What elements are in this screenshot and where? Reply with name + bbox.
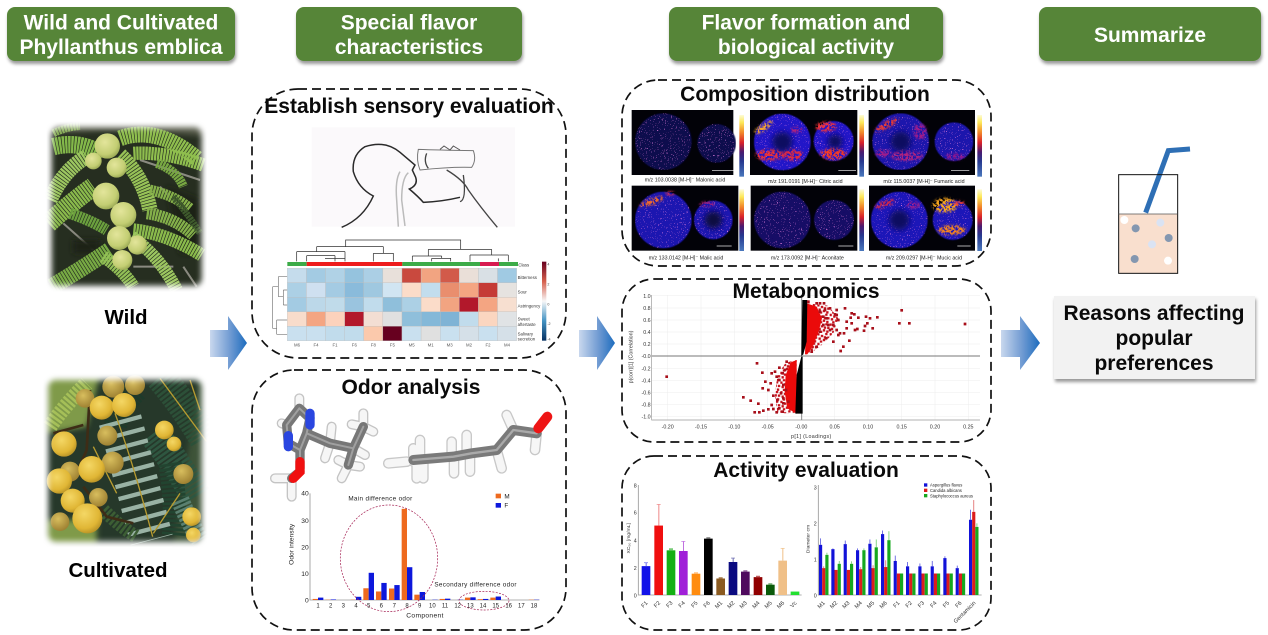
- chart: S-plot of loadings versus correlation: 0.20: [930, 424, 940, 430]
- chart: S-plot of loadings versus correlation: p(corr)[1] (Correlation): [629, 330, 635, 383]
- chart: sensory heatmap: 4: [547, 263, 549, 267]
- chart: inhibition zone diameter bars: F4: [929, 601, 938, 609]
- chart: sensory heatmap: Astringency: [518, 304, 541, 309]
- chart: odor intensity by component: 18: [531, 603, 538, 609]
- chart: S-plot of loadings versus correlation: [629, 294, 980, 440]
- chart: S-plot of loadings versus correlation: 0.6: [643, 318, 651, 324]
- chart: sensory heatmap: F4: [313, 343, 319, 348]
- chart: inhibition zone diameter bars: F2: [905, 601, 914, 609]
- image: malic acid distribution: m/z 133.0142 [M-H]⁻ Malic acid: [649, 255, 723, 261]
- chart: odor intensity by component: [288, 491, 539, 620]
- callout: reasons affecting popular preferences: Reasons affecting: [1064, 302, 1244, 325]
- chart: inhibition zone diameter bars: 1: [814, 557, 817, 563]
- arrow: varieties to flavor: [210, 316, 247, 370]
- chart: inhibition zone diameter bars: M3: [842, 601, 851, 610]
- image: mucic acid distribution: m/z 209.0297 [M-H]⁻ Mucic acid: [886, 255, 962, 261]
- chart: sensory heatmap: -2: [547, 322, 551, 326]
- panel: composition distribution: [622, 80, 991, 266]
- chart: odor intensity by component: Main difference odor: [348, 496, 413, 503]
- chart: sensory heatmap: secretion: [518, 337, 536, 342]
- chart: odor intensity by component: 6: [380, 603, 384, 609]
- panel: odor analysis: [252, 370, 566, 630]
- chart: sensory heatmap: F2: [485, 343, 491, 348]
- callout: reasons affecting popular preferences: popular: [1116, 327, 1192, 350]
- chart: sensory heatmap: aftertaste: [518, 322, 536, 327]
- molecule: aldehyde odor compound: [388, 415, 547, 478]
- photo: cultivated Phyllanthus emblica: [43, 373, 207, 547]
- chart: inhibition zone diameter bars: F1: [892, 601, 901, 609]
- chart: XC50 bars: 4: [634, 538, 637, 544]
- header: flavor formation and biological activity: [669, 7, 943, 61]
- chart: odor intensity by component: 12: [454, 603, 462, 609]
- header: flavor formation and biological activity: Flavor formation and: [702, 12, 910, 34]
- heading: activity evaluation: Activity evaluation: [713, 459, 899, 482]
- heading: metabonomics: Metabonomics: [732, 280, 880, 303]
- chart: odor intensity by component: 8: [405, 603, 409, 609]
- chart: XC50 bars: F3: [665, 601, 674, 609]
- photo: wild Phyllanthus emblica: [47, 122, 207, 292]
- chart: inhibition zone diameter bars: Gentamicin: [953, 601, 977, 625]
- chart: inhibition zone diameter bars: M1: [817, 601, 827, 610]
- chart: S-plot of loadings versus correlation: -0.05: [762, 424, 774, 430]
- chart: S-plot of loadings versus correlation: 0.10: [863, 424, 873, 430]
- chart: sensory heatmap: [273, 240, 551, 348]
- image: aconitate distribution: m/z 173.0092 [M-H]⁻ Aconitate: [771, 255, 844, 261]
- header: summarize: Summarize: [1094, 24, 1206, 47]
- chart: odor intensity by component: 16: [505, 603, 513, 609]
- chart: inhibition zone diameter bars: Candida albicans: [930, 488, 962, 493]
- chart: sensory heatmap: Sweet: [518, 317, 530, 322]
- chart: XC50 bars: F6: [703, 601, 712, 609]
- chart: inhibition zone diameter bars: 0: [814, 593, 817, 599]
- chart: inhibition zone diameter bars: F3: [917, 601, 926, 609]
- image: malonic acid distribution: [632, 110, 744, 184]
- header: summarize: [1039, 7, 1261, 61]
- chart: S-plot of loadings versus correlation: -0.8: [641, 403, 651, 409]
- chart: odor intensity by component: 3: [342, 603, 346, 609]
- image: fumaric acid distribution: m/z 115.0037 [M-H]⁻ Fumaric acid: [883, 179, 965, 185]
- panel: establish sensory evaluation: [252, 89, 566, 358]
- chart: S-plot of loadings versus correlation: -0.0: [641, 354, 651, 360]
- chart: odor intensity by component: 40: [301, 491, 309, 498]
- chart: odor intensity by component: 13: [467, 603, 474, 609]
- chart: odor intensity by component: 2: [329, 603, 333, 609]
- chart: odor intensity by component: F: [504, 503, 508, 510]
- chart: XC50 bars: XC₅₀ [mg/mL]: [626, 523, 632, 554]
- chart: S-plot of loadings versus correlation: -1.0: [641, 415, 651, 421]
- chart: sensory heatmap: -4: [547, 338, 551, 342]
- chart: sensory heatmap: 0: [547, 303, 549, 307]
- chart: XC50 bars: M6: [776, 601, 786, 610]
- header: special flavor characteristics: [296, 7, 522, 61]
- label: wild: Wild: [104, 306, 148, 329]
- chart: XC50 bars: M2: [727, 601, 736, 610]
- callout: reasons affecting popular preferences: preferences: [1094, 352, 1214, 375]
- chart: sensory heatmap: M1: [428, 343, 434, 348]
- chart: sensory heatmap: F8: [371, 343, 376, 348]
- image: mucic acid distribution: [869, 186, 982, 261]
- chart: S-plot of loadings versus correlation: -0.20: [662, 424, 674, 430]
- chart: S-plot of loadings versus correlation: -0.10: [728, 424, 740, 430]
- chart: inhibition zone diameter bars: 3: [814, 486, 817, 492]
- molecule: pyrazine odor compound: [275, 398, 373, 497]
- chart: sensory heatmap: M4: [504, 343, 511, 348]
- chart: odor intensity by component: 20: [301, 545, 309, 552]
- chart: odor intensity by component: 14: [480, 603, 487, 609]
- chart: XC50 bars: 6: [634, 511, 637, 517]
- chart: odor intensity by component: 17: [518, 603, 525, 609]
- chart: S-plot of loadings versus correlation: -0.4: [641, 378, 651, 384]
- chart: inhibition zone diameter bars: M5: [866, 601, 876, 610]
- chart: odor intensity by component: Secondary difference odor: [434, 582, 517, 589]
- heading: odor analysis: Odor analysis: [342, 376, 480, 399]
- chart: S-plot of loadings versus correlation: -0.2: [641, 366, 651, 372]
- chart: odor intensity by component: Component: [406, 613, 444, 620]
- chart: XC50 bars: 8: [634, 483, 637, 489]
- chart: S-plot of loadings versus correlation: 0.4: [643, 330, 651, 336]
- chart: XC50 bars: Vc: [789, 600, 799, 609]
- chart: sensory heatmap: Salivary: [518, 331, 534, 336]
- header: special flavor characteristics: characteristics: [335, 36, 483, 59]
- chart: S-plot of loadings versus correlation: -0.00: [795, 424, 807, 430]
- chart: inhibition zone diameter bars: Diameter cm: [805, 525, 811, 553]
- chart: inhibition zone diameter bars: 2: [814, 521, 817, 527]
- chart: sensory heatmap: Class: [518, 263, 529, 268]
- image: aconitate distribution: [751, 186, 864, 261]
- chart: sensory heatmap: Sour: [518, 289, 527, 294]
- heading: composition distribution: Composition distribution: [680, 83, 930, 106]
- callout: reasons affecting popular preferences: [1054, 296, 1255, 379]
- image: malic acid distribution: [632, 186, 744, 261]
- chart: odor intensity by component: 7: [393, 603, 397, 609]
- chart: S-plot of loadings versus correlation: 0.2: [643, 342, 651, 348]
- header: wild and cultivated: Wild and Cultivated: [24, 12, 218, 34]
- image: fumaric acid distribution: [869, 110, 982, 185]
- chart: sensory heatmap: M2: [466, 343, 473, 348]
- chart: XC50 bars: [626, 483, 802, 610]
- chart: inhibition zone diameter bars: M4: [854, 601, 864, 610]
- chart: odor intensity by component: 4: [354, 603, 358, 609]
- header: flavor formation and biological activity: biological activity: [718, 36, 894, 59]
- chart: XC50 bars: F5: [690, 601, 699, 609]
- arrow: formation to summary: [1001, 316, 1040, 370]
- arrow: flavor to formation: [579, 316, 615, 370]
- chart: sensory heatmap: F1: [332, 343, 338, 348]
- chart: odor intensity by component: 10: [301, 571, 309, 578]
- chart: S-plot of loadings versus correlation: 0.8: [643, 306, 651, 312]
- chart: odor intensity by component: 30: [301, 518, 309, 525]
- heading: establish sensory evaluation: Establish sensory evaluation: [264, 95, 554, 118]
- chart: inhibition zone diameter bars: M6: [879, 601, 889, 610]
- chart: odor intensity by component: 5: [367, 603, 371, 609]
- chart: XC50 bars: M1: [714, 601, 724, 610]
- chart: inhibition zone diameter bars: [805, 483, 982, 625]
- chart: odor intensity by component: 0: [305, 597, 309, 604]
- chart: odor intensity by component: 15: [492, 603, 500, 609]
- chart: sensory heatmap: M5: [409, 343, 415, 348]
- chart: sensory heatmap: M6: [294, 343, 301, 348]
- panel: metabonomics: [622, 279, 991, 442]
- chart: odor intensity by component: M: [504, 494, 510, 501]
- chart: S-plot of loadings versus correlation: 0.25: [963, 424, 974, 430]
- chart: odor intensity by component: Odor intensity: [288, 523, 295, 565]
- chart: S-plot of loadings versus correlation: -0.15: [695, 424, 707, 430]
- icon: glass of drink with straw: [1119, 149, 1190, 273]
- chart: odor intensity by component: 1: [316, 603, 320, 609]
- chart: XC50 bars: F4: [678, 601, 687, 609]
- chart: S-plot of loadings versus correlation: -0.6: [641, 391, 651, 397]
- header: wild and cultivated: Phyllanthus emblica: [19, 36, 223, 59]
- chart: XC50 bars: M3: [739, 601, 749, 610]
- image: citric acid distribution: m/z 191.0191 [M-H]⁻ Citric acid: [768, 179, 843, 185]
- chart: inhibition zone diameter bars: F5: [942, 601, 951, 609]
- illustration: person drinking: [312, 127, 515, 227]
- chart: XC50 bars: 2: [634, 566, 637, 572]
- chart: odor intensity by component: 10: [429, 603, 436, 609]
- chart: inhibition zone diameter bars: Staphylococcus aureus: [930, 493, 973, 498]
- chart: inhibition zone diameter bars: Aspergillus flavus: [930, 483, 962, 488]
- image: malonic acid distribution: m/z 103.0038 [M-H]⁻ Malonic acid: [645, 178, 725, 184]
- image: citric acid distribution: [750, 110, 864, 185]
- chart: S-plot of loadings versus correlation: 0.05: [829, 424, 840, 430]
- chart: S-plot of loadings versus correlation: 0.15: [896, 424, 907, 430]
- chart: inhibition zone diameter bars: F6: [954, 601, 963, 609]
- chart: XC50 bars: M4: [752, 601, 761, 610]
- chart: sensory heatmap: M3: [447, 343, 453, 348]
- header: wild and cultivated: [7, 7, 235, 61]
- panel: activity evaluation: [622, 456, 991, 630]
- chart: sensory heatmap: 2: [547, 283, 549, 287]
- chart: S-plot of loadings versus correlation: p[1] (Loadings): [791, 434, 832, 440]
- chart: inhibition zone diameter bars: M2: [829, 601, 839, 610]
- chart: odor intensity by component: 11: [442, 603, 449, 609]
- chart: XC50 bars: M5: [764, 601, 774, 610]
- chart: XC50 bars: F1: [640, 601, 649, 609]
- label: cultivated: Cultivated: [68, 559, 168, 582]
- header: special flavor characteristics: Special flavor: [341, 12, 477, 34]
- chart: S-plot of loadings versus correlation: 1.0: [643, 294, 651, 300]
- chart: XC50 bars: 0: [634, 593, 637, 599]
- chart: sensory heatmap: F5: [390, 343, 395, 348]
- chart: odor intensity by component: 9: [418, 603, 422, 609]
- chart: sensory heatmap: F6: [352, 343, 357, 348]
- chart: XC50 bars: F2: [653, 601, 662, 609]
- chart: sensory heatmap: Bitterness: [518, 275, 537, 280]
